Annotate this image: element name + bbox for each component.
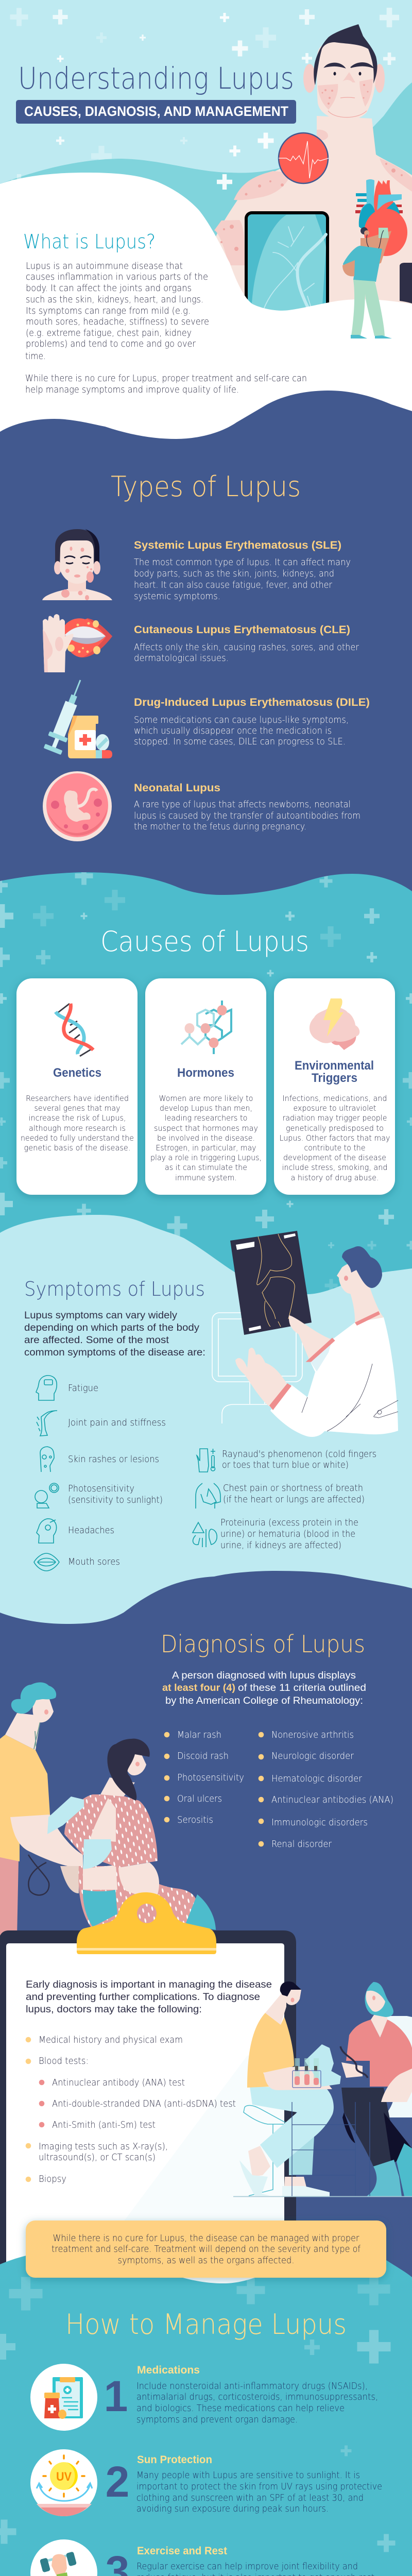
patient dress upper	[64, 1794, 158, 1868]
subtitle banner: CAUSES, DIAGNOSIS, AND MANAGEMENT	[24, 104, 288, 119]
heading: types of lupus: Types of Lupus	[111, 470, 301, 503]
title: Understanding Lupus	[18, 61, 294, 96]
text block: SLE: The most common type of lupus. It can affect many	[134, 557, 351, 568]
text: hormones: play a role in triggering Lupus,	[150, 1153, 262, 1162]
panel: manage lupus teal background	[0, 2250, 412, 2576]
subtitle banner	[16, 100, 296, 124]
list: doctor tests: Medical history and physical exam	[39, 2035, 183, 2045]
text block: symptoms intro: depending on which parts of the body	[24, 1323, 200, 1333]
text block: sun protection: Many people with Lupus are sensitive to sunlight. It is	[136, 2470, 360, 2481]
text block: medications	[136, 2364, 378, 2425]
list: diagnosis criteria: Hematologic disorder	[271, 1774, 363, 1784]
text: hormones	[150, 1094, 262, 1182]
text block: sun protection: important to protect the skin from UV rays using protective	[136, 2482, 382, 2492]
text: environmental: Lupus. Other factors that may	[279, 1133, 390, 1143]
icon: hand and lips (CLE)	[43, 614, 112, 672]
clip	[77, 1892, 216, 1954]
patient arm	[341, 2062, 363, 2078]
icon: raynaud	[197, 1449, 215, 1472]
text block: what is lupus	[25, 261, 307, 395]
patient neck	[100, 1777, 135, 1797]
text block: SLE: heart. It can also cause fatigue, fever, and other	[134, 580, 333, 590]
text: genetics: although more research is	[29, 1124, 126, 1133]
technician forearm	[264, 2066, 332, 2090]
doctor hair	[11, 1682, 56, 1714]
list: symptoms: urine) or hematuria (blood in the	[220, 1529, 355, 1539]
list: symptoms	[68, 1383, 376, 1567]
list: symptoms: Mouth sores	[68, 1557, 120, 1567]
text block: diagnosis intro: A person diagnosed with lupus displays	[172, 1670, 356, 1681]
list: diagnosis criteria: Malar rash	[177, 1730, 221, 1740]
doctor neck	[5, 1713, 41, 1750]
panel: hero header	[0, 0, 412, 443]
text block: exercise: Regular exercise can help improve joint flexibility and	[136, 2562, 358, 2572]
hero lower crosses	[11, 174, 232, 190]
list: symptoms: Fatigue	[68, 1383, 98, 1394]
text block: what is lupus: problems) and tend to come and go over	[26, 339, 196, 349]
patient face	[125, 1749, 146, 1775]
text block: DILE	[134, 697, 370, 747]
list: symptoms: Photosensitivity	[68, 1484, 134, 1494]
text: environmental: radiation may trigger people	[282, 1113, 387, 1123]
list: doctor tests: ultrasound(s), or CT scan(s)	[39, 2153, 156, 2163]
text block: SLE: body parts, such as the skin, joints, kidneys, and	[134, 569, 334, 579]
callout: no cure box: While there is no cure for Lupus, the disease can be managed with proper	[53, 2233, 359, 2244]
text block: sun protection: avoiding sun exposure during peak sun hours.	[136, 2504, 329, 2514]
step 1: medications	[30, 2364, 378, 2431]
table frame	[292, 2102, 370, 2196]
text: environmental: Infections, medications, and	[282, 1094, 387, 1103]
illustration: blood draw scene	[233, 1981, 412, 2197]
text block: what is lupus: time.	[25, 351, 46, 362]
text block: SLE: Systemic Lupus Erythematosus (SLE)	[134, 539, 341, 551]
text: genetics	[21, 1094, 134, 1153]
list: symptoms: (sensitivity to sunlight)	[68, 1495, 163, 1505]
text: hormones: immune system.	[175, 1173, 237, 1182]
list: symptoms: Chest pain or shortness of breath	[223, 1483, 363, 1494]
text block: what is lupus: (e.g. extreme fatigue, chest pain, kidney	[26, 328, 192, 338]
icon: photosensitivity	[35, 1483, 59, 1508]
icon: headache	[37, 1519, 57, 1543]
icon: skin rash	[40, 1447, 54, 1472]
doctor head	[337, 1263, 368, 1294]
illustration: heart	[355, 179, 407, 256]
panel: diagnosis navy background	[0, 1571, 412, 2329]
panel: white intro wave	[0, 173, 412, 443]
sleeve of the man, background right	[400, 263, 412, 303]
icon: kidney	[193, 1522, 217, 1547]
text: environmental: include stress, smoking, and	[282, 1163, 387, 1172]
text block: sun protection: Sun Protection	[137, 2454, 212, 2466]
text block: CLE: dermatological issues.	[134, 653, 229, 664]
text block: neonatal	[134, 782, 360, 832]
list: diagnosis criteria: Immunologic disorders	[271, 1818, 368, 1828]
text block: early diagnosis: and preventing further complications. To diagnose	[26, 1992, 260, 2003]
panel: card hormones	[145, 978, 266, 1195]
text: genetics: several genes that may	[34, 1104, 121, 1113]
heading: environmental triggers	[295, 1059, 374, 1085]
illustration: doctor examining patient	[0, 1682, 216, 1937]
text block: what is lupus: causes inflammation in various parts of the	[26, 272, 208, 282]
text block: neonatal: lupus is caused by the transfer of autoantibodies from	[134, 811, 360, 821]
text block: what is lupus: Lupus is an autoimmune disease that	[26, 261, 183, 272]
text block: sun protection	[136, 2454, 382, 2514]
icon: DNA	[56, 1004, 93, 1056]
technician shirt	[247, 2013, 294, 2088]
doctor shirt	[0, 1735, 50, 1861]
heading: environmental triggers: Environmental	[295, 1059, 374, 1073]
panel: causes teal background with crosses	[0, 867, 412, 1309]
heading: what is lupus: What is Lupus?	[23, 230, 156, 253]
panel: symptoms background	[0, 1215, 412, 1633]
icon: UV sun: UV	[56, 2470, 72, 2484]
chair behind patient	[373, 2016, 412, 2117]
icon: syringe and pill bottle (DILE)	[43, 676, 112, 758]
text block: what is lupus: such as the skin, kidneys, heart, and lungs.	[26, 295, 203, 305]
heading: genetics: Genetics	[53, 1066, 101, 1080]
text block: what is lupus: mouth sores, headache, stiffness) to severe	[26, 317, 209, 327]
text: environmental: a history of drug abuse.	[290, 1173, 379, 1182]
text: environmental: exposure to ultraviolet	[294, 1104, 376, 1113]
patient hair	[107, 1739, 150, 1801]
text block: early diagnosis	[26, 1979, 272, 2015]
text: environmental	[279, 1094, 390, 1182]
list: diagnosis criteria: Nonerosive arthritis	[271, 1730, 354, 1740]
patient dress lower	[78, 1866, 197, 1932]
text block: what is lupus: body. It can affect the joints and organs	[26, 283, 192, 294]
text: hormones: suspect that hormones may	[154, 1124, 258, 1133]
heading: diagnosis: Diagnosis of Lupus	[161, 1630, 365, 1658]
text block: what is lupus: help manage symptoms and improve quality of life.	[25, 385, 239, 395]
mouth	[328, 97, 367, 117]
malar rash	[318, 72, 373, 110]
doctor pants	[0, 1855, 19, 1937]
icon: lung scan tablet	[245, 211, 329, 317]
doctor neck	[350, 1283, 384, 1323]
text block: symptoms intro: common symptoms of the disease are:	[24, 1347, 205, 1358]
x-ray film	[230, 1231, 312, 1335]
upper hand	[289, 1315, 332, 1361]
list: diagnosis criteria: Neurologic disorder	[271, 1751, 354, 1761]
list: symptoms: urine, if kidneys are affected)	[220, 1540, 341, 1551]
text block: DILE: which usually disappear once the medication is	[134, 726, 332, 736]
text block: DILE: stopped. In some cases, DILE can progress to SLE.	[134, 737, 346, 747]
list: diagnosis criteria: Photosensitivity	[177, 1773, 244, 1783]
illustration: man with rash	[214, 24, 412, 314]
illustration: doctor with x-ray	[212, 1231, 398, 1437]
ears	[303, 64, 316, 93]
list: doctor tests: Anti-double-stranded DNA (anti-dsDNA) test	[52, 2099, 236, 2109]
text: genetics: Researchers have identified	[26, 1094, 129, 1103]
lower hand	[235, 1348, 287, 1406]
list: doctor tests: Blood tests:	[39, 2056, 89, 2066]
icon: face with rash (SLE)	[42, 529, 112, 600]
list: doctor tests: Antinuclear antibody (ANA) test	[52, 2078, 185, 2088]
technician neck and head	[265, 1989, 286, 2025]
list: doctor tests: Biopsy	[39, 2174, 66, 2184]
list: diagnosis criteria: Discoid rash	[177, 1751, 229, 1761]
text block: sun protection: clothing and sunscreen with an SPF of at least 30, and	[136, 2493, 364, 2503]
list: diagnosis criteria: Serositis	[177, 1815, 213, 1825]
text block: exercise: Exercise and Rest	[137, 2545, 227, 2557]
stool	[244, 2106, 288, 2196]
hair	[314, 24, 377, 85]
technician feet	[248, 2146, 270, 2177]
hero teal waves	[0, 155, 412, 319]
lower glove	[83, 1839, 112, 1869]
heading: causes of lupus: Causes of Lupus	[100, 925, 309, 958]
icon: dumbbell and sleep mask	[30, 2539, 97, 2576]
icon: fatigue	[36, 1376, 57, 1400]
step 3: exercise and rest	[30, 2539, 374, 2576]
text block: diagnosis intro: at least four (4)	[162, 1683, 235, 1693]
icon: brain with lightning	[310, 998, 359, 1050]
text block: DILE: Some medications can cause lupus-like symptoms,	[134, 715, 349, 725]
step 2: sun protection	[30, 2449, 382, 2516]
patient legs	[341, 2088, 397, 2166]
coat details	[302, 1364, 398, 1431]
text block: medications: Include nonsteroidal anti-inflammatory drugs (NSAIDs),	[136, 2381, 368, 2392]
hero sky	[0, 0, 412, 309]
text block: neonatal: A rare type of lupus that affects newborns, neonatal	[134, 800, 351, 810]
text: hormones: develop Lupus than men,	[160, 1104, 252, 1113]
text block: exercise	[136, 2545, 374, 2576]
number 2: 2	[106, 2458, 129, 2506]
icon: UV sun	[30, 2449, 97, 2516]
list: symptoms: or toes that turn blue or white)	[222, 1460, 349, 1470]
patient hair and face	[365, 1982, 393, 2017]
text block: CLE	[134, 624, 359, 664]
list: symptoms: Joint pain and stiffness	[68, 1418, 166, 1428]
text: genetics: needed to fully understand the	[21, 1133, 134, 1143]
floor line	[233, 2196, 412, 2197]
doctor face	[32, 1698, 54, 1722]
icon: mouth sores	[34, 1553, 59, 1571]
upper glove	[47, 1797, 84, 1834]
list: symptoms: Headaches	[68, 1526, 114, 1536]
doctor hair	[342, 1246, 382, 1288]
number 1: 1	[104, 2372, 128, 2420]
list: diagnosis criteria: Renal disorder	[271, 1839, 332, 1850]
text block: what is lupus: Its symptoms can range from mild (e.g.	[26, 306, 191, 316]
text block: symptoms intro: are affected. Some of the most	[24, 1335, 169, 1346]
list: diagnosis criteria	[164, 1730, 393, 1850]
text block: diagnosis intro: of these 11 criteria outlined	[238, 1683, 366, 1693]
patient knee	[118, 1862, 159, 1899]
patient shoes	[83, 1890, 117, 1927]
text block: symptoms intro: Lupus symptoms can vary widely	[24, 1310, 178, 1321]
text: hormones: Women are more likely to	[159, 1094, 253, 1103]
callout: no cure box: symptoms, as well as the organs affected.	[117, 2256, 295, 2266]
heading: environmental triggers: Triggers	[312, 1071, 357, 1085]
text block: diagnosis intro: by the American College of Rheumatology:	[165, 1696, 363, 1706]
text block: diagnosis intro	[162, 1670, 366, 1706]
panel: card environmental triggers	[274, 978, 395, 1195]
list: diagnosis criteria: Antinuclear antibodies (ANA)	[271, 1795, 393, 1805]
text block: medications: Medications	[137, 2364, 200, 2376]
text: hormones: be involved in the disease.	[157, 1133, 255, 1143]
tourniquet	[340, 2046, 368, 2078]
illustration: small doctor with stethoscope	[342, 227, 392, 338]
faint chair reflection	[124, 2056, 284, 2222]
list: doctor tests	[26, 2035, 236, 2184]
text block: early diagnosis: lupus, doctors may take the following:	[26, 2004, 202, 2015]
list: symptoms: (if the heart or lungs are affected)	[223, 1495, 365, 1505]
text block: SLE	[134, 539, 351, 602]
text block: neonatal: the mother to the fetus during pregnancy.	[134, 822, 306, 832]
nose	[339, 80, 355, 97]
panel: clipboard	[0, 1892, 296, 2291]
text: hormones: Estrogen, in particular, may	[156, 1143, 256, 1153]
callout: no cure box	[26, 2221, 386, 2278]
clipboard paper	[6, 1943, 284, 2287]
text block: medications: and biologics. These medications can help relieve	[136, 2403, 345, 2414]
text: genetics: increase the risk of Lupus,	[29, 1113, 126, 1123]
symptom icons	[34, 1376, 220, 1571]
text block: medications: symptoms and prevent organ damage.	[136, 2415, 298, 2425]
text block: early diagnosis: Early diagnosis is important in managing the disease	[26, 1979, 272, 1990]
test tubes rack	[293, 2058, 321, 2088]
text block: neonatal: Neonatal Lupus	[134, 782, 220, 794]
patient boots	[367, 2160, 402, 2196]
icon: ECG monitor	[279, 133, 329, 183]
list: diagnosis criteria: Oral ulcers	[177, 1794, 222, 1804]
panel: card genetics	[16, 978, 138, 1195]
text: hormones: as it can stimulate the	[165, 1163, 247, 1172]
list: doctor tests: Imaging tests such as X-ray(s),	[39, 2142, 168, 2152]
patient sweater	[346, 2020, 412, 2087]
list: symptoms: Raynaud's phenomenon (cold fingers	[222, 1449, 376, 1460]
icon: joint pain	[37, 1411, 57, 1436]
heading: symptoms: Symptoms of Lupus	[24, 1278, 205, 1300]
doctor coat	[270, 1317, 398, 1437]
technician trousers	[289, 2137, 314, 2175]
manage crosses	[0, 2273, 412, 2576]
text: environmental: genetically predisposed to	[286, 1124, 384, 1133]
text: hormones: leading researchers to	[165, 1113, 247, 1123]
brows and eyes	[325, 63, 373, 67]
text block: medications: antimalarial drugs, corticosteroids, immunosuppressants,	[136, 2392, 378, 2402]
viewing monitor outline	[212, 1313, 302, 1423]
face	[317, 42, 376, 120]
doctor arm	[10, 1815, 83, 1869]
text: environmental: contribute to the	[304, 1143, 366, 1153]
hero crosses	[10, 8, 399, 166]
text block: symptoms intro	[24, 1310, 205, 1358]
heading: hormones: Hormones	[177, 1066, 234, 1080]
body rash	[214, 130, 412, 265]
text block: CLE: Cutaneous Lupus Erythematosus (CLE)	[134, 624, 350, 636]
body	[214, 116, 412, 314]
text block: what is lupus: While there is no cure for Lupus, proper treatment and self-care can	[25, 374, 307, 384]
icon: fetus in womb (neonatal)	[43, 771, 112, 841]
heading: how to manage lupus: How to Manage Lupus	[65, 2308, 347, 2341]
text block: DILE: Drug-Induced Lupus Erythematosus (DILE)	[134, 697, 370, 708]
list: symptoms: Proteinuria (excess protein in the	[220, 1518, 358, 1528]
callout: no cure box: treatment and self-care. Treatment will depend on the severity and type of	[52, 2244, 361, 2255]
panel: types of lupus navy background	[0, 391, 412, 895]
icon: chest pain	[196, 1483, 220, 1509]
text: environmental: development of the disease	[283, 1153, 386, 1162]
list: doctor tests: Anti-Smith (anti-Sm) test	[52, 2120, 156, 2130]
text block: SLE: systemic symptoms.	[134, 591, 220, 602]
text block: CLE: Affects only the skin, causing rashes, sores, and other	[134, 642, 359, 653]
text: genetics: genetic basis of the disease.	[24, 1143, 131, 1153]
icon: hormone molecule	[181, 1001, 231, 1054]
icon: prescription and bottle	[30, 2364, 97, 2431]
stethoscope tube	[28, 1855, 49, 1895]
list: symptoms: Skin rashes or lesions	[68, 1454, 159, 1465]
